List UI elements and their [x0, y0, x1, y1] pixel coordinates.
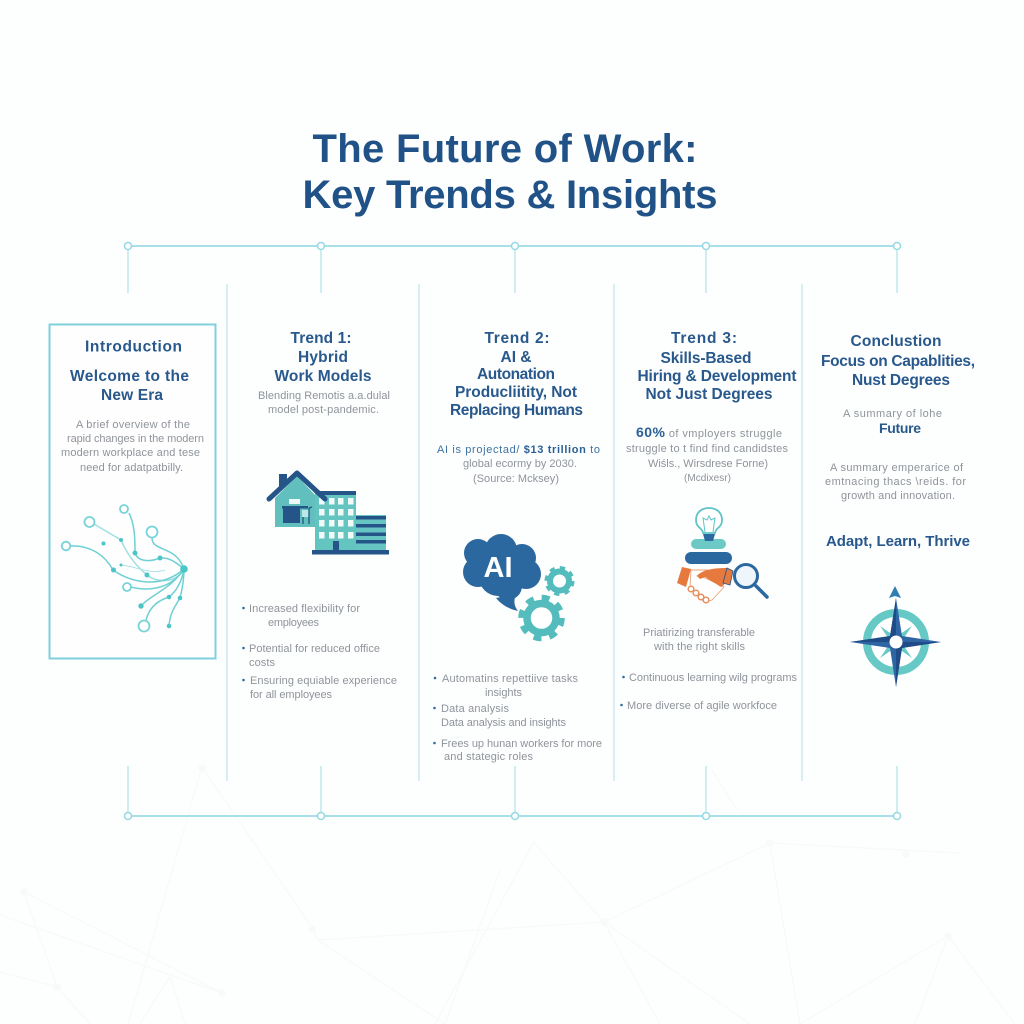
- text: trend 3 skills note: with the right skills: [653, 641, 746, 653]
- list: trend 1 benefits: [242, 603, 397, 701]
- list: trend 3 benefits: Continuous learning wilg programs: [629, 672, 798, 684]
- list: trend 1 benefits: Ensuring equiable experience: [250, 675, 397, 687]
- list: trend 2 benefits: Data analysis and insights: [441, 717, 566, 729]
- heading: trend 2: [450, 330, 583, 419]
- text: trend 3 statistic: [626, 424, 788, 484]
- icon: AI cloud with gears: [463, 534, 572, 639]
- text: introduction summary: [61, 419, 204, 474]
- icon: AI cloud with gears: AI: [484, 552, 512, 584]
- icon: neural network: [62, 505, 188, 632]
- list: trend 2 benefits: Frees up hunan workers for more: [441, 738, 602, 750]
- heading: conclusion: Nust Degrees: [852, 372, 950, 389]
- text: trend 3 statistic: (Mcdixesr): [684, 473, 731, 484]
- title: Key Trends & Insights: [302, 173, 718, 217]
- list: trend 1 benefits: employees: [268, 617, 320, 629]
- icon: compass: [850, 586, 941, 687]
- heading: trend 1: Trend 1:: [290, 330, 352, 347]
- heading: trend 1: Work Models: [274, 368, 372, 385]
- text: trend 2 statistic: global ecormy by 2030.: [463, 458, 577, 470]
- title: [302, 127, 718, 217]
- text: introduction summary: rapid changes in the modern: [67, 433, 204, 445]
- heading: conclusion: [821, 333, 975, 389]
- panel: trend 3: [620, 330, 798, 712]
- text: conclusion summary: emtnacing thacs \reids. for: [825, 476, 966, 488]
- heading: trend 2: Replacing Humans: [450, 402, 583, 419]
- heading: trend 1: [274, 330, 372, 385]
- list: trend 1 benefits: Increased flexibility for: [249, 603, 360, 615]
- text: conclusion subtitle: A summary of lohe: [843, 408, 942, 420]
- list: trend 2 benefits: Data analysis: [441, 703, 510, 715]
- text: conclusion summary: growth and innovation.: [841, 490, 955, 502]
- bottom connector timeline: [124, 766, 900, 820]
- panel: trend 2: [433, 330, 602, 763]
- text: conclusion subtitle: Future: [879, 420, 921, 436]
- text: introduction summary: need for adatpatbilly.: [80, 462, 183, 474]
- heading: trend 1: Hybrid: [298, 349, 348, 366]
- text: conclusion subtitle: [843, 408, 942, 436]
- icon: lightbulb, handshake and magnifier: [677, 508, 767, 603]
- heading: trend 3: Trend 3:: [671, 330, 737, 347]
- text: trend 2 statistic: (Source: Mcksey): [473, 473, 559, 485]
- list: trend 3 benefits: [620, 672, 798, 712]
- text: trend 3 skills note: [643, 627, 755, 653]
- icon: house and office building: [269, 473, 389, 554]
- list: trend 1 benefits: costs: [249, 657, 276, 669]
- heading: conclusion: Conclustion: [850, 333, 942, 350]
- list: trend 2 benefits: insights: [485, 687, 522, 699]
- panel: introduction: [50, 324, 216, 658]
- heading: trend 2: Producliitity, Not: [455, 384, 577, 401]
- heading: trend 2: Autonation: [477, 366, 555, 383]
- heading: trend 2: AI &: [500, 349, 532, 366]
- text: trend 3 statistic: Wiśls., Wirsdrese Forne): [648, 458, 768, 470]
- text: trend 3 statistic: 60% of vmployers struggle: [636, 424, 782, 440]
- list: trend 1 benefits: for all employees: [250, 689, 332, 701]
- top connector timeline: [124, 242, 900, 293]
- heading: introduction: Welcome to the: [70, 368, 189, 385]
- text: trend 2 statistic: AI is projectad/ $13 trillion to: [437, 444, 600, 456]
- text: trend 1 summary: model post-pandemic.: [268, 404, 379, 416]
- text: conclusion summary: [825, 462, 966, 502]
- column dividers: [227, 284, 802, 781]
- text: trend 1 summary: [258, 390, 390, 416]
- heading: trend 3: Hiring & Development: [638, 368, 796, 385]
- heading: trend 3: [638, 330, 796, 403]
- text: conclusion summary: A summary emperarice of: [830, 462, 964, 474]
- title: The Future of Work:: [312, 127, 698, 171]
- heading: conclusion: Focus on Capablities,: [821, 353, 975, 370]
- list: trend 1 benefits: Potential for reduced office: [249, 643, 380, 655]
- text: introduction summary: A brief overview of the: [76, 419, 190, 431]
- list: trend 3 benefits: More diverse of agile workfoce: [627, 700, 777, 712]
- text: call to action: Adapt, Learn, Thrive: [826, 533, 970, 550]
- heading: trend 3: Skills-Based: [660, 350, 752, 367]
- text: trend 3 skills note: Priatirizing transferable: [643, 627, 755, 639]
- list: trend 2 benefits: [433, 673, 602, 763]
- panel: conclusion: [821, 333, 975, 687]
- list: trend 2 benefits: Automatins repettiive tasks: [442, 673, 578, 685]
- heading: introduction: New Era: [101, 387, 163, 404]
- background network pattern: [0, 765, 1015, 1024]
- heading: trend 3: Not Just Degrees: [646, 386, 772, 403]
- panel frame: [50, 324, 216, 658]
- heading: trend 2: Trend 2:: [484, 330, 550, 347]
- list: trend 2 benefits: and stategic roles: [444, 751, 534, 763]
- heading: introduction: Introduction: [85, 338, 182, 356]
- text: trend 1 summary: Blending Remotis a.a.dulal: [258, 390, 390, 402]
- text: trend 3 statistic: struggle to t find find candidstes: [626, 443, 788, 455]
- text: introduction summary: modern workplace and tese: [61, 447, 200, 459]
- panel: trend 1: [242, 330, 397, 701]
- text: trend 2 statistic: [437, 444, 600, 485]
- heading: introduction: [70, 338, 189, 404]
